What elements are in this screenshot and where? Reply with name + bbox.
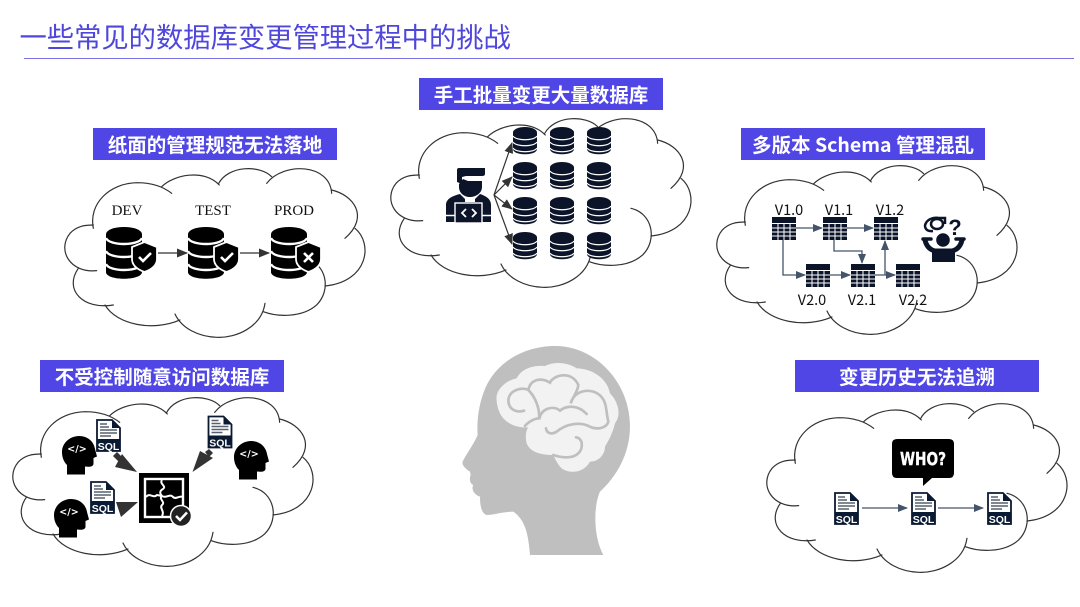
version labels: V2.1 [848, 289, 876, 310]
heading: change history: 变更历史无法追溯 [839, 361, 995, 390]
icon: developer head 3 [54, 499, 89, 538]
arrows between environments [158, 252, 269, 254]
cloud outline [13, 398, 313, 566]
heading: paper standards: 纸面的管理规范无法落地 [108, 129, 322, 158]
icon: developer head 1: </> [67, 444, 87, 455]
icon: SQL file 1: SQL [98, 441, 120, 453]
icon: puzzle with check [139, 473, 192, 526]
database grid [513, 127, 611, 259]
version labels: V1.0 [775, 199, 803, 220]
icon: SQL file 3 [90, 482, 114, 515]
icon: SQL file 1 [96, 420, 120, 453]
icon: confused person [923, 215, 964, 262]
cloud outline [391, 119, 691, 287]
panel: untraceable history cloud [767, 404, 1067, 572]
icon: PROD database [271, 227, 321, 279]
environment labels [112, 203, 314, 219]
environment labels: TEST [195, 203, 231, 219]
cloud outline [767, 404, 1067, 572]
cloud outline [717, 166, 1017, 334]
icon: TEST database [188, 227, 239, 279]
arrows between files [862, 507, 983, 509]
panel: uncontrolled access cloud [13, 398, 313, 566]
heading: change history [795, 360, 1039, 392]
environment labels: PROD [274, 203, 314, 219]
icon: developer head 3: </> [59, 507, 79, 518]
icon: confused person: ? [948, 215, 962, 240]
icon: SQL file 2 [208, 416, 232, 450]
icon: SQL file 3: SQL [92, 503, 114, 515]
panel: manual batch changes cloud [391, 119, 691, 287]
version labels: V2.2 [899, 289, 927, 310]
icon: SQL file A [834, 493, 858, 526]
icon: SQL file A: SQL [836, 514, 858, 526]
version labels [775, 199, 927, 310]
version labels: V1.2 [876, 199, 904, 220]
block arrows [113, 449, 213, 517]
version labels: V2.0 [798, 289, 826, 310]
icon: developer head 1 [62, 436, 97, 474]
icon: WHO speech bubble [892, 439, 954, 486]
icon: SQL file C: SQL [989, 514, 1011, 526]
icon: developer [446, 168, 491, 223]
icon: SQL file B: SQL [913, 514, 935, 526]
panel: schema versions cloud [717, 166, 1017, 334]
icon: SQL file C [988, 493, 1012, 526]
heading: manual batch changes: 手工批量变更大量数据库 [434, 79, 648, 108]
version labels: V1.1 [825, 199, 853, 220]
version arrows [783, 228, 895, 275]
icon: SQL file B [912, 493, 936, 526]
cloud outline [65, 169, 365, 337]
icon: developer head 2 [234, 441, 269, 480]
icon: developer head 2: </> [239, 449, 259, 460]
title: 一些常见的数据库变更管理过程中的挑战 [20, 22, 511, 53]
icon: SQL file 2: SQL [209, 438, 231, 450]
icon: WHO speech bubble: WHO? [900, 449, 946, 470]
icon: head with brain [462, 346, 630, 555]
icon: DEV database [106, 227, 157, 279]
arrows to databases [494, 143, 512, 244]
heading: schema versions: 多版本 Schema 管理混乱 [752, 129, 974, 158]
panel: paper-only standards cloud [65, 169, 365, 337]
environment labels: DEV [112, 203, 143, 219]
version tables [772, 217, 920, 287]
heading: uncontrolled access: 不受控制随意访问数据库 [55, 361, 269, 390]
